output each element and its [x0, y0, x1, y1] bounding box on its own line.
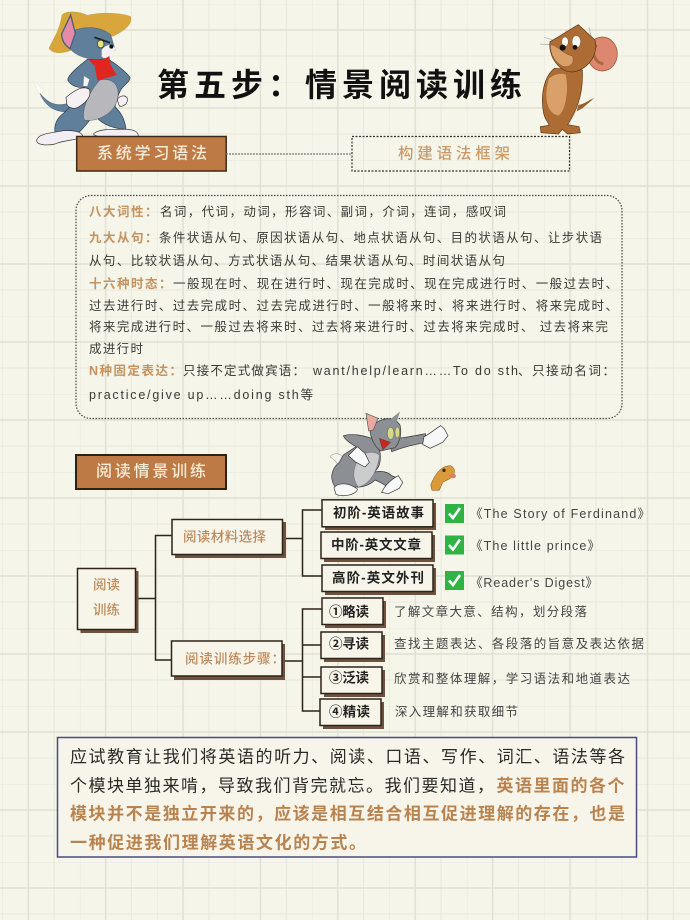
text: fixed expressions [89, 363, 615, 402]
heading: learn grammar systematically [77, 136, 226, 171]
callout: summary: 应试教育让我们将英语的听力、阅读、口语、写作、词汇、语法等各 [70, 748, 625, 766]
check: beginner [445, 504, 464, 523]
text: fixed expressions: want/help/learn……To do sth [312, 364, 518, 378]
title: 第五步：情景阅读训练 [157, 67, 522, 103]
node: training steps [172, 641, 285, 680]
node: extensive reading: ③泛读 [329, 670, 370, 686]
text: little prince: 《The little prince》 [470, 539, 600, 553]
node: skim [322, 598, 386, 628]
check: advanced [445, 571, 464, 590]
node: skim: ①略读 [329, 604, 370, 620]
text: sixteen tenses: 一般现在时、现在进行时、现在完成时、现在完成进行时、一般过去时、 [173, 276, 618, 291]
text: skim description: 了解文章大意、结构，划分段落 [394, 604, 587, 619]
text: extensive description: 欣赏和整体理解，学习语法和地道表达 [394, 671, 630, 686]
node: beginner: 初阶-英语故事 [333, 504, 424, 520]
icon: Tom running [330, 412, 456, 496]
text: intensive description: 深入理解和获取细节 [395, 705, 518, 719]
text: sixteen tenses: 十六种时态： [89, 276, 172, 291]
text: scan description: 查找主题表达、各段落的旨意及表达依据 [394, 636, 644, 651]
node: beginner [322, 500, 436, 530]
heading: build grammar framework: 构建语法框架 [398, 144, 510, 162]
node: training steps: 阅读训练步骤： [185, 650, 285, 666]
node: reading training root: 阅读 [93, 576, 120, 592]
heading: reading scenario training [76, 455, 226, 489]
node: advanced: 高阶-英文外刊 [332, 570, 424, 586]
text: sixteen tenses [89, 276, 618, 356]
text: nine clauses [89, 230, 602, 268]
node: scan: ②寻读 [329, 636, 370, 652]
text: sixteen tenses: 过去进行时、过去完成时、过去完成进行时、一般将来时、将来进行时、将来完成时、 [89, 298, 618, 313]
text: eight parts of speech: 八大词性： [89, 204, 158, 219]
node: material selection [172, 520, 286, 558]
callout: summary: 个模块单独来啃，导致我们背完就忘。我们要知道， [70, 776, 494, 796]
text: fixed expressions: 、只接动名词： [518, 363, 615, 378]
icon: Tom with straw hat [33, 12, 138, 145]
text: fixed expressions: practice/give up……doing sth等 [89, 387, 313, 402]
callout: summary: 一种促进我们理解英语文化的方式。 [70, 832, 366, 852]
text: nine clauses: 从句、比较状语从句、方式状语从句、结果状语从句、时间状语从句 [89, 253, 505, 268]
heading: learn grammar systematically: 系统学习语法 [97, 144, 207, 162]
node: intensive reading [320, 699, 384, 729]
node: advanced [322, 565, 436, 595]
text: fixed expressions: N种固定表达： [89, 363, 182, 378]
node: intermediate: 中阶-英文文章 [331, 536, 421, 552]
callout: summary: 英语里面的各个 [496, 776, 624, 796]
text: nine clauses: 九大从句： [89, 230, 158, 245]
heading: reading scenario training: 阅读情景训练 [96, 462, 206, 480]
node: intensive reading: ④精读 [329, 704, 370, 720]
check: intermediate [445, 536, 464, 554]
node: extensive reading [321, 667, 385, 697]
text: Ferdinand: 《The Story of Ferdinand》 [470, 507, 650, 521]
text: nine clauses: 条件状语从句、原因状语从句、地点状语从句、目的状语从句、让步状语 [159, 230, 602, 245]
node: reading training root: 训练 [93, 602, 120, 618]
node: material selection: 阅读材料选择 [183, 528, 266, 544]
text: fixed expressions: 只接不定式做宾语： [183, 363, 305, 378]
text: sixteen tenses: 将来完成进行时、一般过去将来时、过去将来进行时、过去将来完成时、 过去将来完 [89, 319, 608, 334]
icon: Jerry standing [540, 25, 617, 134]
mind map connectors [138, 510, 322, 711]
node: intermediate [321, 532, 435, 562]
node: reading training root [78, 568, 138, 633]
text: Reader's Digest: 《Reader's Digest》 [470, 576, 598, 590]
heading: build grammar framework [352, 136, 570, 171]
panel: grammar overview [76, 196, 622, 418]
text: eight parts of speech: 名词，代词，动词，形容词、副词，介词，连词，感叹词 [160, 204, 506, 219]
text: sixteen tenses: 成进行时 [89, 342, 143, 356]
callout: summary: 模块并不是独立开来的，应该是相互结合相互促进理解的存在，也是 [70, 804, 625, 824]
node: scan [321, 632, 385, 662]
callout: summary [58, 738, 636, 857]
